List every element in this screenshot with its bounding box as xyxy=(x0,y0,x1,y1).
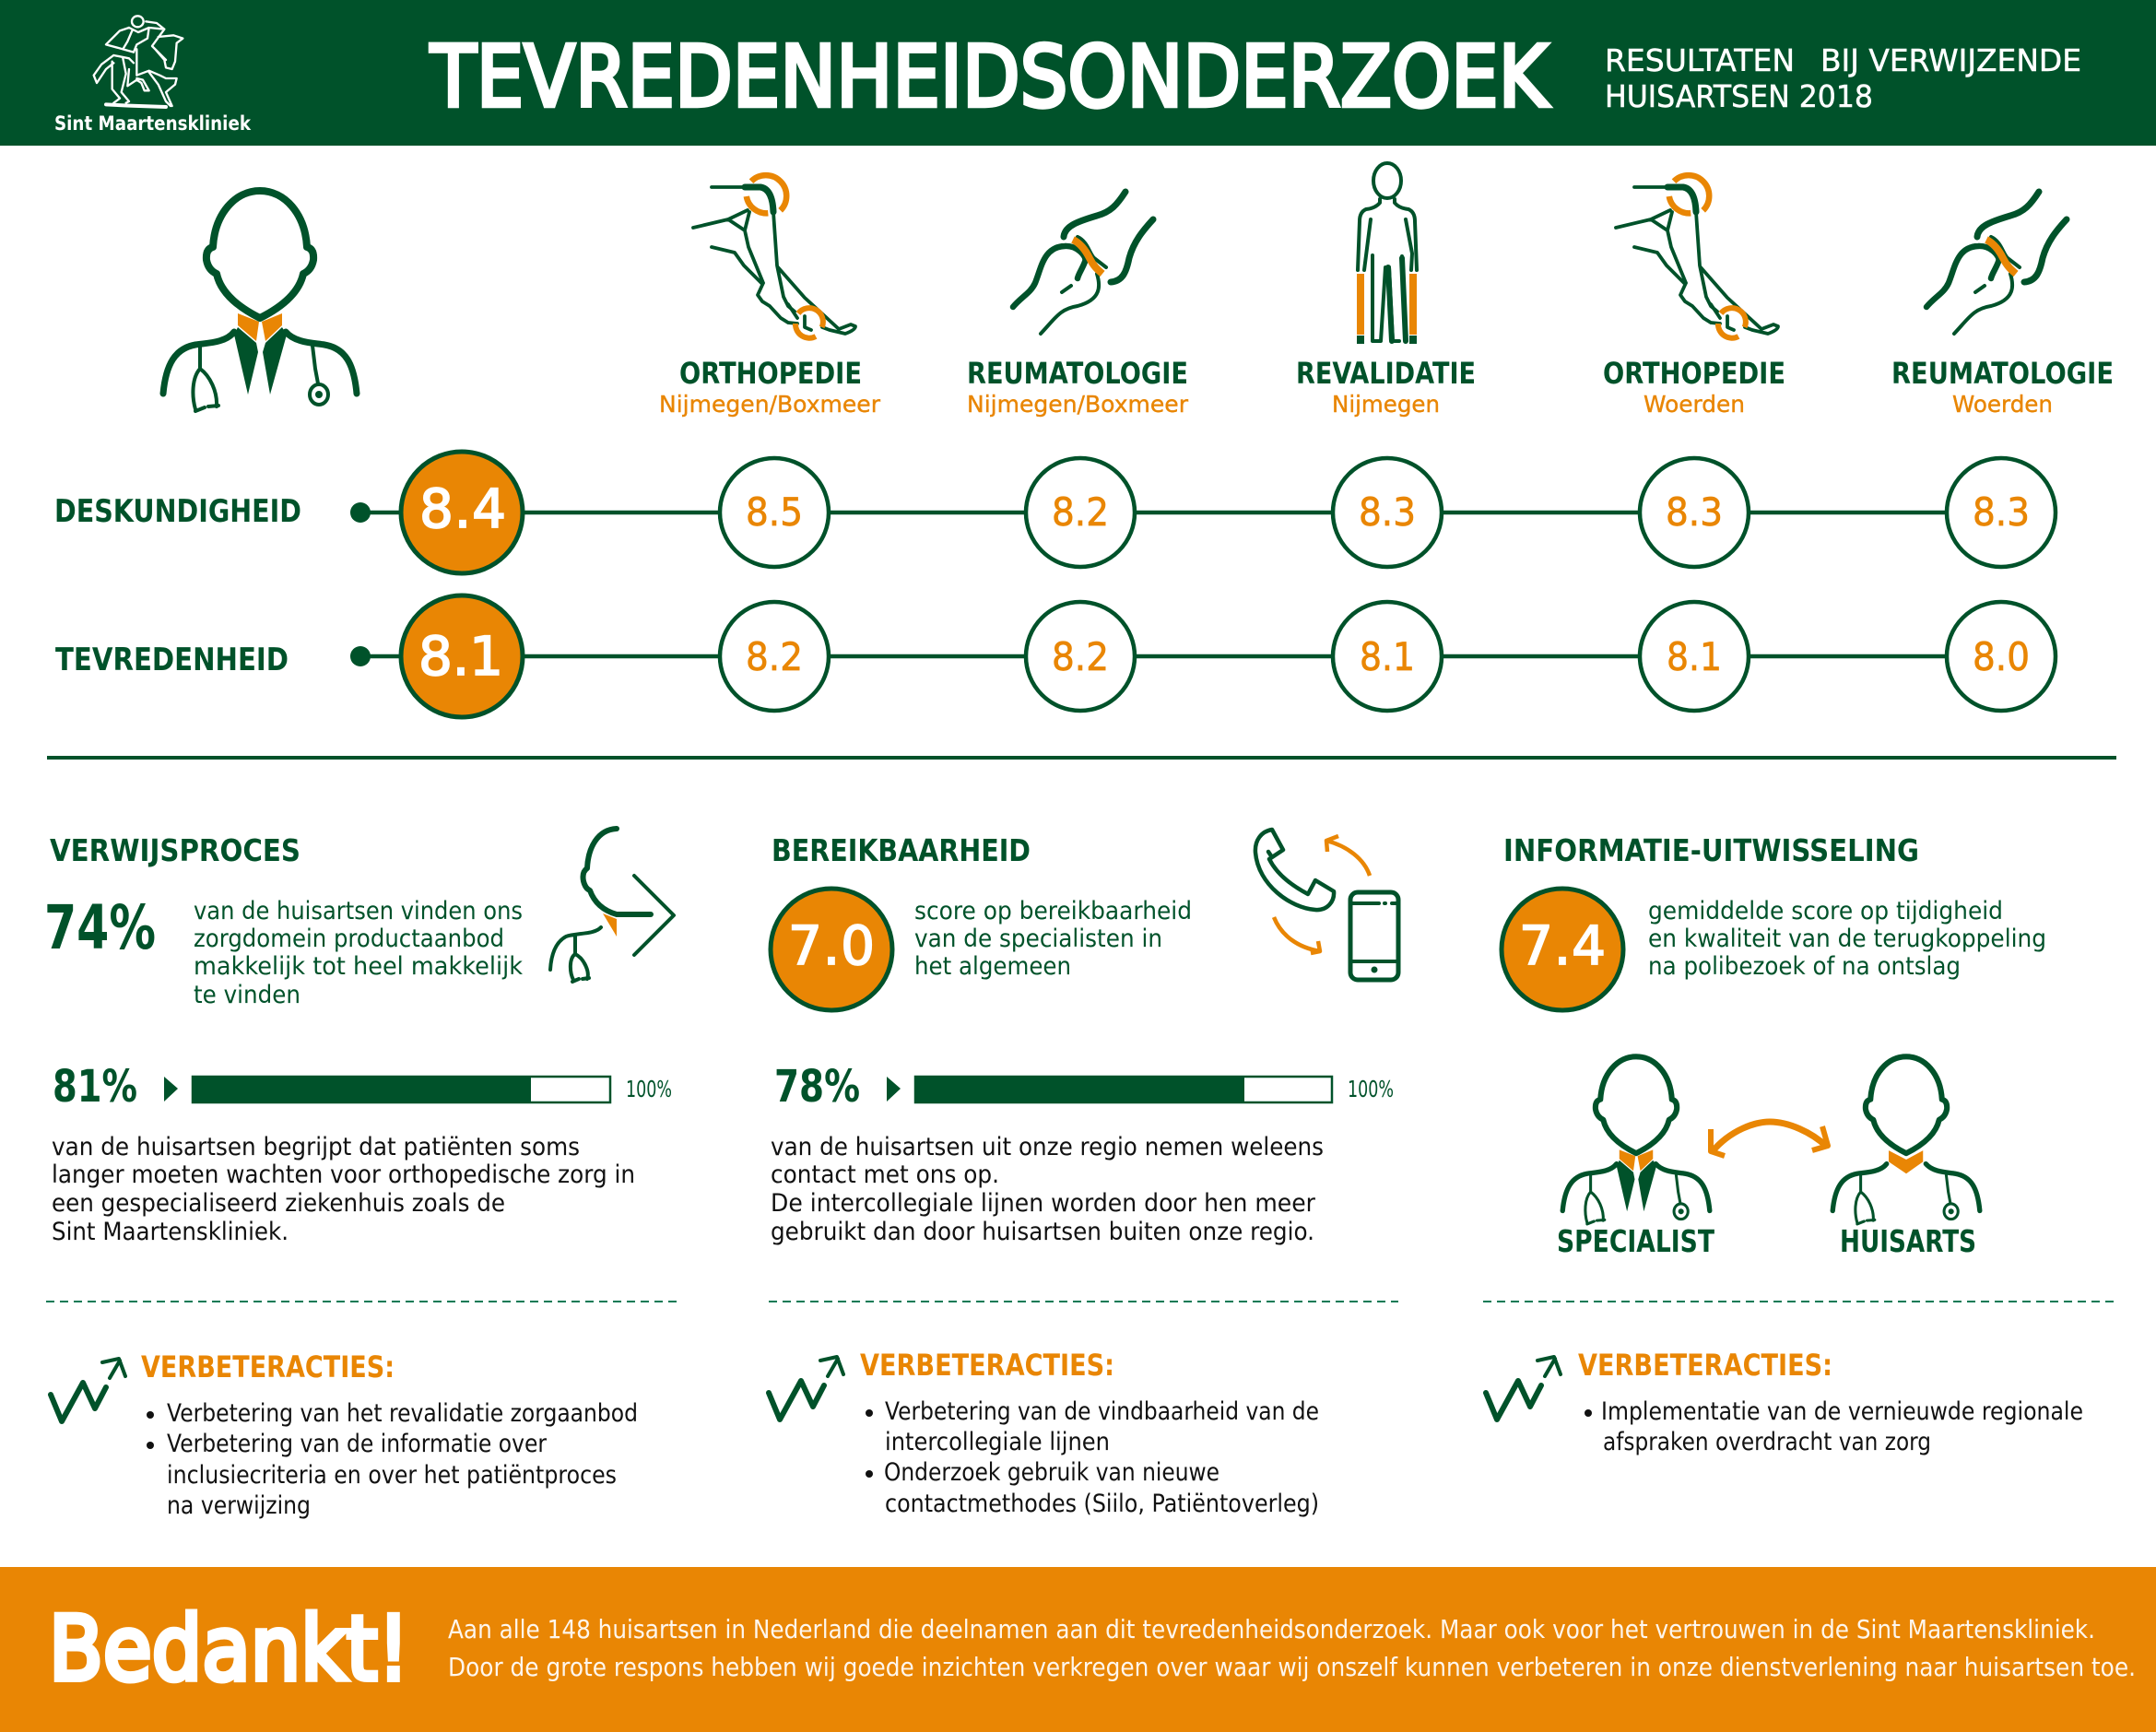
score description xyxy=(1648,897,2046,981)
actions list xyxy=(1585,1397,2083,1456)
score revalidatie xyxy=(1333,458,1442,567)
score reumatologie xyxy=(1026,602,1135,711)
column: reumatologie Woerden xyxy=(1891,192,2114,418)
score row: tevredenheid xyxy=(55,595,2056,717)
actions: verwijsproces xyxy=(51,1349,638,1520)
stat description: van de huisartsen vinden ons xyxy=(194,897,523,925)
icon: joint xyxy=(1926,192,2067,334)
stat description: te vinden xyxy=(194,981,300,1009)
body text: Sint Maartenskliniek. xyxy=(52,1218,289,1246)
actions list: inclusiecriteria en over het patiëntproces xyxy=(167,1461,617,1490)
column heading: ORTHOPEDIE xyxy=(1603,356,1785,391)
score description: het algemeen xyxy=(914,952,1071,981)
body text: een gespecialiseerd ziekenhuis zoals de xyxy=(52,1189,505,1218)
score reumatologie: 8.2 xyxy=(1052,489,1109,535)
icon: phones xyxy=(1255,830,1398,980)
column heading: REUMATOLOGIE xyxy=(967,356,1188,391)
subtitle: HUISARTSEN 2018 xyxy=(1605,78,1873,114)
actions list: Verbetering van de informatie over xyxy=(167,1430,548,1458)
progress value: 78% xyxy=(774,1061,860,1113)
total score xyxy=(401,452,523,573)
score description: gemiddelde score op tijdigheid xyxy=(1648,897,2003,925)
body text: van de huisartsen begrijpt dat patiënten soms xyxy=(52,1133,580,1161)
score reumatologie Woerden: 8.0 xyxy=(1973,634,2030,679)
body text: van de huisartsen uit onze regio nemen weleens xyxy=(771,1133,1324,1161)
score reumatologie xyxy=(1026,458,1135,567)
body text: langer moeten wachten voor orthopedische zorg in xyxy=(52,1161,635,1189)
column location: Nijmegen/Boxmeer xyxy=(967,391,1189,418)
column heading: ORTHOPEDIE xyxy=(679,356,862,391)
column heading: REUMATOLOGIE xyxy=(1891,356,2114,391)
score 7.0: 7.0 xyxy=(788,914,875,977)
column location: Woerden xyxy=(1644,391,1745,418)
stat description: zorgdomein productaanbod xyxy=(194,925,504,953)
actions heading: VERBETERACTIES: xyxy=(1578,1348,1832,1383)
icon: huisarts xyxy=(1832,1056,1980,1224)
icon: leg xyxy=(693,175,855,338)
total score: 8.1 xyxy=(418,625,503,688)
score description: van de specialisten in xyxy=(914,925,1162,953)
column location: Woerden xyxy=(1952,391,2053,418)
title: TEVREDENHEIDSONDERZOEK xyxy=(430,28,1549,126)
score reumatologie Woerden xyxy=(1947,602,2056,711)
label: huisarts: HUISARTS xyxy=(1840,1223,1976,1259)
subtitle: RESULTATEN xyxy=(1605,42,1795,78)
icon: trend arrow xyxy=(1486,1357,1561,1420)
score orthopedie Woerden xyxy=(1640,602,1749,711)
actions list: Verbetering van het revalidatie zorgaanbod xyxy=(167,1399,638,1428)
icon: doctor xyxy=(163,191,357,411)
body text: De intercollegiale lijnen worden door hen meer xyxy=(771,1189,1316,1218)
score orthopedie xyxy=(720,602,829,711)
actions list xyxy=(866,1397,1319,1518)
score 7.4 xyxy=(1502,889,1623,1010)
actions: informatie-uitwisseling xyxy=(1486,1348,2083,1456)
stat description xyxy=(194,897,523,1009)
column: revalidatie Nijmegen xyxy=(1296,163,1476,418)
body text xyxy=(771,1133,1324,1246)
score description: en kwaliteit van de terugkoppeling xyxy=(1648,925,2046,953)
score 7.4: 7.4 xyxy=(1519,914,1606,977)
actions list: na verwijzing xyxy=(167,1491,311,1520)
big stat 74%: 74% xyxy=(44,892,156,963)
thank-you text xyxy=(448,1614,2136,1682)
row label: TEVREDENHEID xyxy=(55,642,289,678)
footer band xyxy=(0,1567,2156,1732)
score orthopedie Woerden: 8.1 xyxy=(1667,634,1722,679)
heading: INFORMATIE-UITWISSELING xyxy=(1503,832,1919,868)
actions heading: VERBETERACTIES: xyxy=(141,1349,395,1384)
score description xyxy=(914,897,1192,981)
score reumatologie Woerden xyxy=(1947,458,2056,567)
score description: na polibezoek of na ontslag xyxy=(1648,952,1961,981)
progress max: 100% xyxy=(1348,1076,1394,1102)
score reumatologie: 8.2 xyxy=(1052,634,1109,679)
icon: trend arrow xyxy=(51,1359,125,1421)
icon: trend arrow xyxy=(769,1357,843,1420)
score revalidatie: 8.1 xyxy=(1360,634,1415,679)
subtitle: BIJ VERWIJZENDE xyxy=(1820,42,2081,78)
actions list: Verbetering van de vindbaarheid van de xyxy=(885,1397,1319,1426)
score orthopedie: 8.2 xyxy=(746,634,803,679)
actions list: contactmethodes (Siilo, Patiëntoverleg) xyxy=(885,1490,1319,1518)
score orthopedie: 8.5 xyxy=(746,489,803,535)
body text: gebruikt dan door huisartsen buiten onze regio. xyxy=(771,1218,1314,1246)
thank-you heading: Bedankt! xyxy=(49,1597,409,1701)
panel: verwijsproces xyxy=(44,829,674,1246)
body text xyxy=(52,1133,635,1246)
header band xyxy=(0,0,2156,146)
progress value: 81% xyxy=(53,1061,137,1113)
icon: person xyxy=(1358,163,1417,344)
heading: BEREIKBAARHEID xyxy=(772,832,1031,868)
total score xyxy=(401,595,523,717)
score 7.0 xyxy=(771,889,892,1010)
score orthopedie xyxy=(720,458,829,567)
icon: joint xyxy=(1013,192,1153,334)
logo wordmark: Sint Maartenskliniek xyxy=(54,112,252,135)
actions heading: VERBETERACTIES: xyxy=(860,1348,1114,1383)
column location: Nijmegen/Boxmeer xyxy=(659,391,881,418)
total score: 8.4 xyxy=(419,477,506,540)
icon: specialist xyxy=(1562,1056,1710,1224)
progress 78% xyxy=(774,1061,1394,1113)
actions list: Onderzoek gebruik van nieuwe xyxy=(884,1458,1219,1487)
body text: contact met ons op. xyxy=(771,1161,999,1189)
subtitle xyxy=(1605,42,2081,114)
score description: score op bereikbaarheid xyxy=(914,897,1192,925)
column: orthopedie Nijmegen/Boxmeer xyxy=(659,175,881,418)
actions: bereikbaarheid xyxy=(769,1348,1319,1518)
score reumatologie Woerden: 8.3 xyxy=(1973,489,2030,535)
panel: informatie-uitwisseling xyxy=(1502,832,2046,1259)
actions list: intercollegiale lijnen xyxy=(885,1428,1110,1456)
progress 81% xyxy=(53,1061,672,1113)
icon: doctor with arrow xyxy=(550,829,674,982)
score orthopedie Woerden xyxy=(1640,458,1749,567)
progress max: 100% xyxy=(626,1076,672,1102)
column: reumatologie Nijmegen/Boxmeer xyxy=(967,192,1189,418)
score row: deskundigheid xyxy=(54,452,2056,573)
arrow: exchange xyxy=(1711,1122,1828,1156)
column: orthopedie Woerden xyxy=(1603,175,1785,418)
score orthopedie Woerden: 8.3 xyxy=(1666,489,1723,535)
heading: VERWIJSPROCES xyxy=(50,832,300,868)
logo: Sint Maartenskliniek xyxy=(54,16,252,135)
actions list xyxy=(147,1399,638,1520)
actions list: afspraken overdracht van zorg xyxy=(1603,1428,1931,1456)
icon: leg xyxy=(1616,175,1778,338)
column location: Nijmegen xyxy=(1332,391,1440,418)
logo: rider on horse xyxy=(94,16,183,107)
panel: bereikbaarheid xyxy=(771,830,1398,1246)
stat description: makkelijk tot heel makkelijk xyxy=(194,952,523,981)
label: specialist: SPECIALIST xyxy=(1557,1223,1714,1259)
actions list: Implementatie van de vernieuwde regionale xyxy=(1601,1397,2083,1426)
score revalidatie xyxy=(1333,602,1442,711)
row label: DESKUNDIGHEID xyxy=(54,493,301,530)
column heading: REVALIDATIE xyxy=(1296,356,1476,391)
score revalidatie: 8.3 xyxy=(1359,489,1416,535)
